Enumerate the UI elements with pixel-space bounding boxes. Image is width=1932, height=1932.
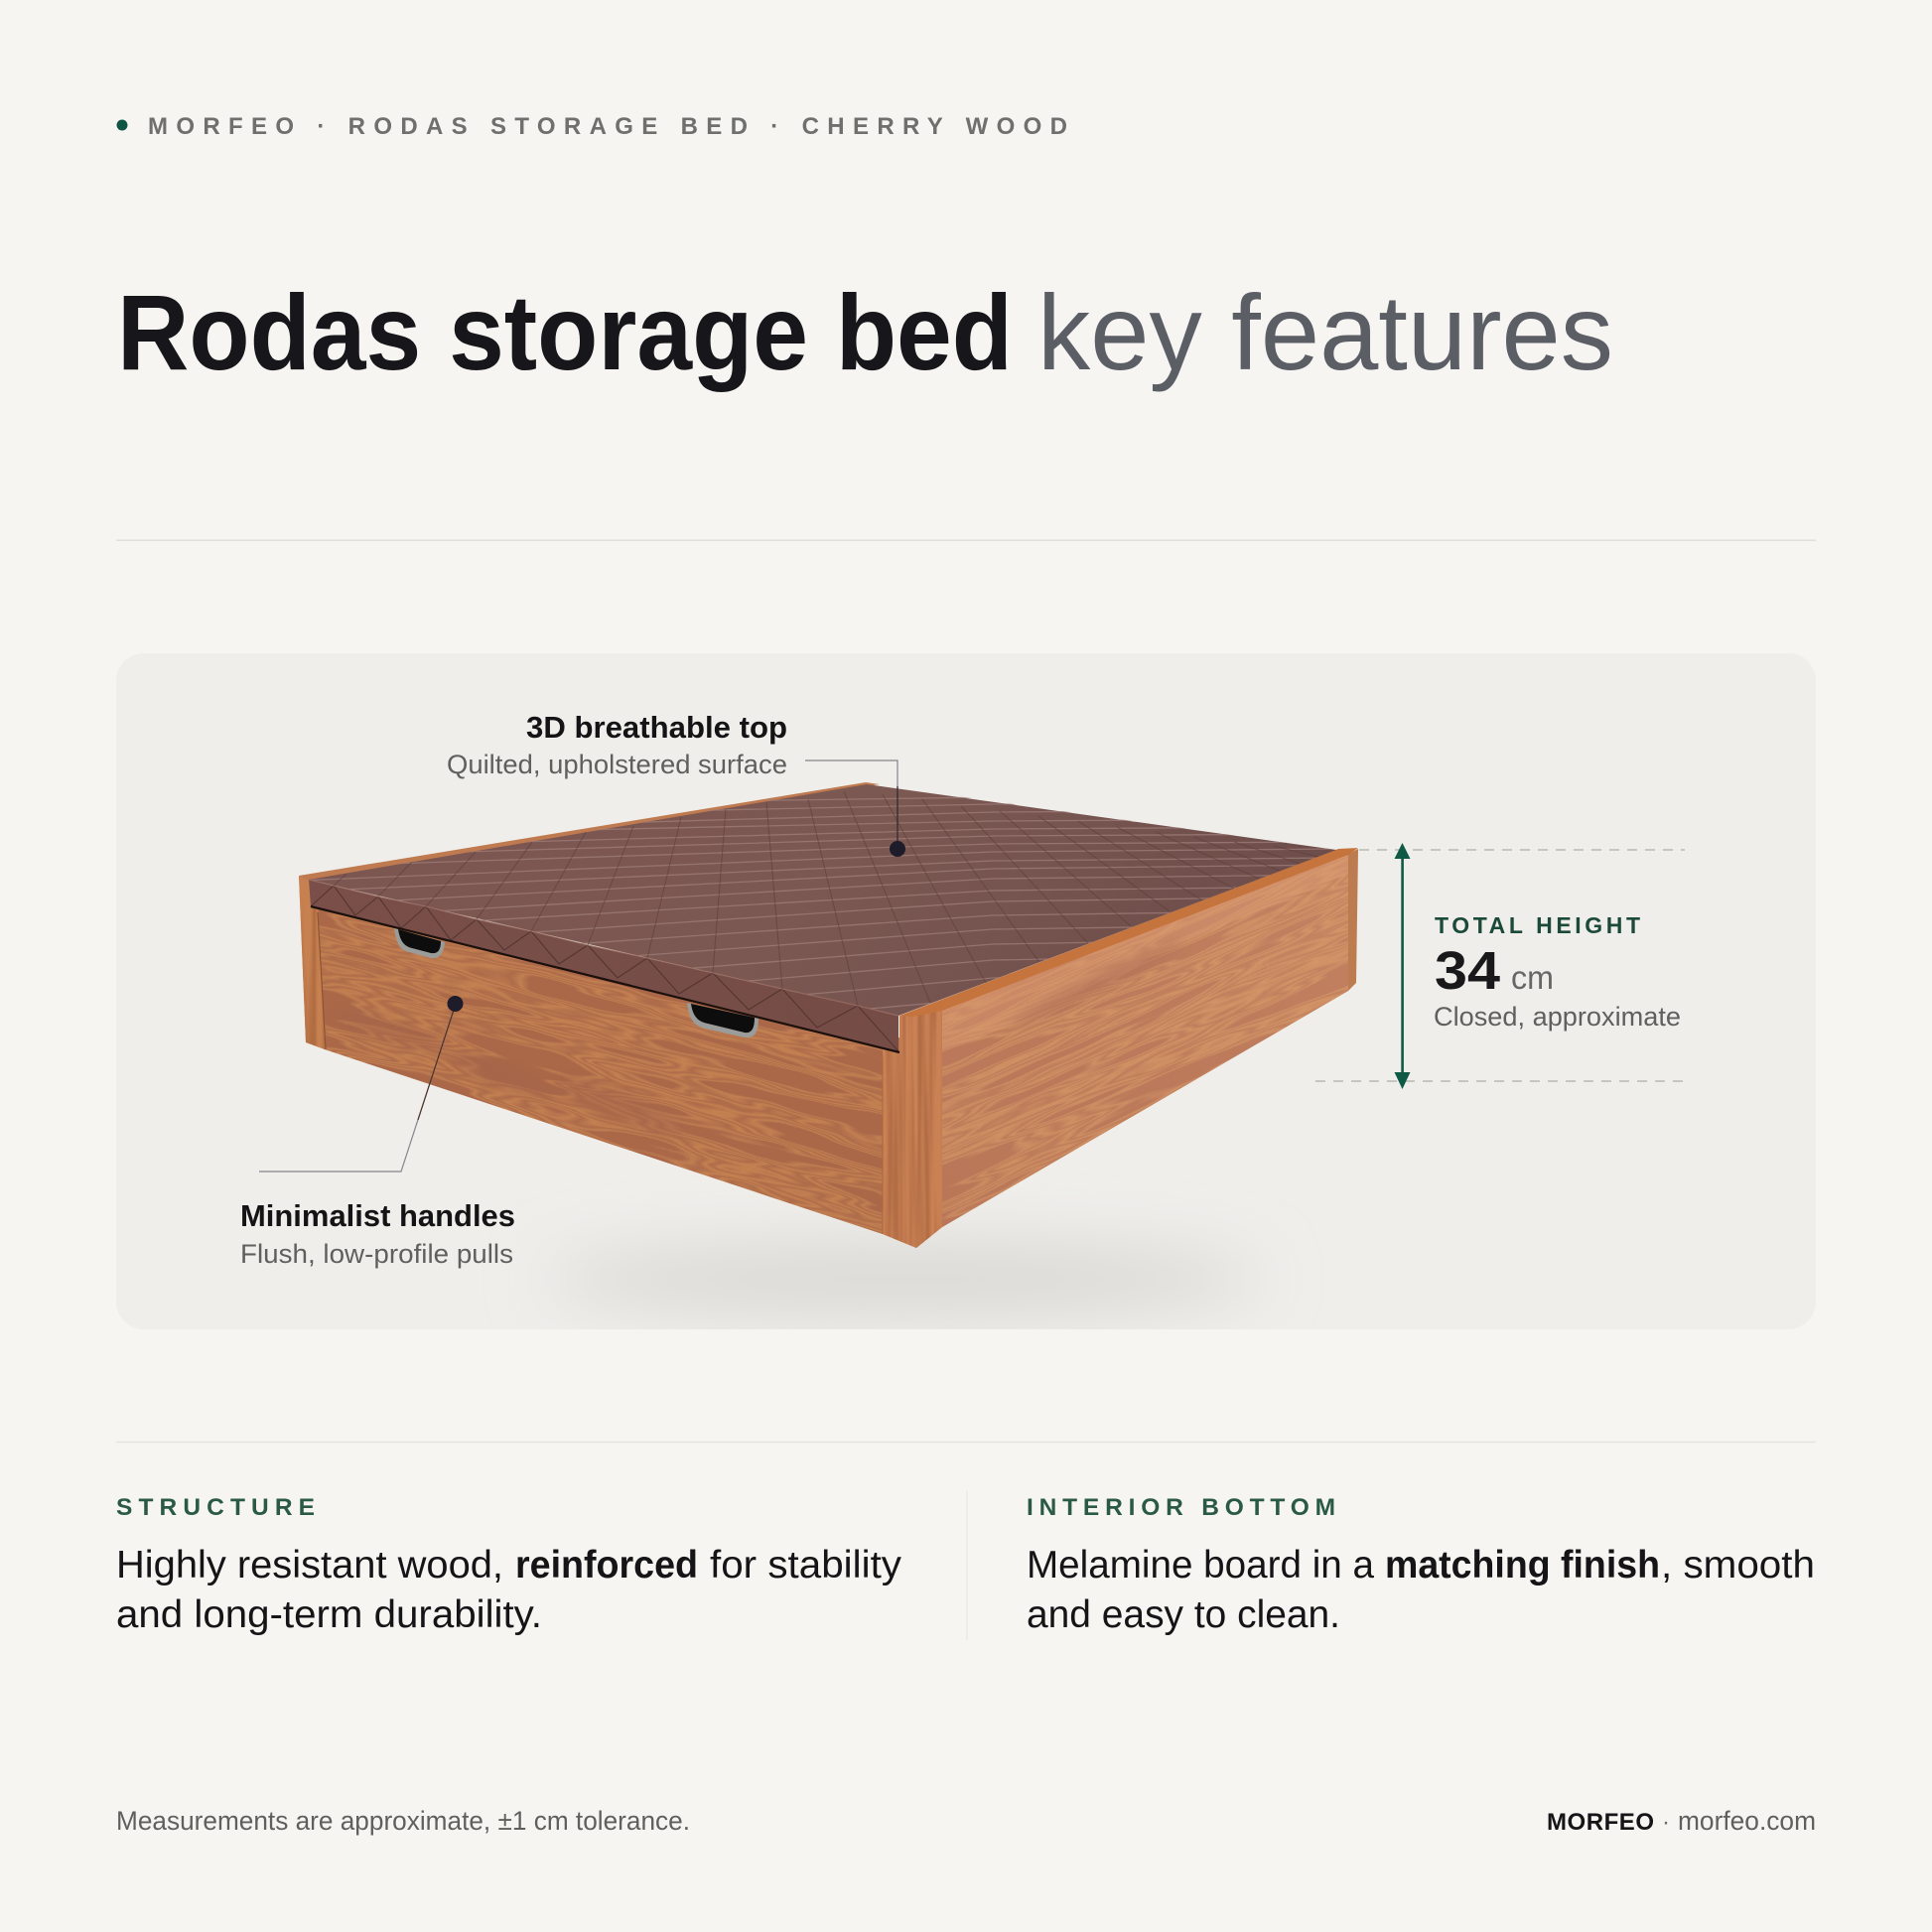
panel inner edge line bbox=[318, 912, 326, 1049]
quilted top surface bbox=[309, 784, 1336, 1016]
front wood panel bbox=[318, 909, 883, 1234]
double arrow bbox=[1394, 843, 1410, 1089]
brand name: MORFEO bbox=[1547, 1809, 1654, 1836]
footer brand bbox=[1547, 1806, 1816, 1836]
section heading: INTERIOR BOTTOM bbox=[1027, 1494, 1335, 1521]
band zigzag stitching bbox=[311, 886, 898, 1051]
body line one end: for stability bbox=[710, 1544, 902, 1587]
unit: cm bbox=[1511, 959, 1554, 996]
fold highlight bbox=[309, 880, 898, 1016]
leader line on bed bbox=[418, 1004, 456, 1120]
dashed guide top bbox=[1359, 849, 1685, 851]
body line one end: , smooth bbox=[1661, 1544, 1815, 1587]
label: TOTAL HEIGHT bbox=[1435, 912, 1640, 938]
leader line bbox=[259, 1004, 456, 1172]
callout heading: 3D breathable top bbox=[526, 710, 787, 745]
section heading: STRUCTURE bbox=[116, 1494, 315, 1521]
dark quilting lines bbox=[334, 791, 1318, 1006]
wooden frame top edge, back-left bbox=[299, 782, 880, 881]
right end strip bbox=[1348, 849, 1358, 991]
value: 34 bbox=[1435, 941, 1500, 1001]
title light part: key features bbox=[1037, 272, 1613, 392]
icon: left handle bbox=[394, 928, 445, 958]
header eyebrow bbox=[117, 113, 1067, 140]
body line two: and easy to clean. bbox=[1027, 1593, 1340, 1636]
icon: green status dot bbox=[117, 119, 127, 131]
title bbox=[117, 272, 1613, 392]
callout heading: Minimalist handles bbox=[240, 1198, 515, 1233]
body line one: Highly resistant wood, bbox=[116, 1544, 503, 1587]
leader line on bed bbox=[897, 786, 898, 849]
eyebrow text: MORFEO · RODAS STORAGE BED · CHERRY WOOD bbox=[148, 113, 1067, 140]
left corner post bbox=[299, 876, 325, 1049]
separator: · bbox=[1662, 1809, 1670, 1836]
text block: interior bottom bbox=[1027, 1494, 1815, 1636]
light quilting lines bbox=[311, 796, 1332, 1009]
post seam line bbox=[882, 1057, 884, 1234]
note: Closed, approximate bbox=[1434, 1002, 1681, 1032]
text block: structure bbox=[116, 1494, 902, 1636]
panel: product illustration bbox=[242, 716, 1685, 1329]
dimension: total height bbox=[1315, 843, 1685, 1089]
callout description: Quilted, upholstered surface bbox=[447, 750, 787, 779]
callout: 3D breathable top bbox=[447, 710, 905, 857]
panel background bbox=[116, 653, 1816, 1329]
website: morfeo.com bbox=[1678, 1806, 1816, 1836]
quilting lines bbox=[311, 791, 1332, 1009]
shadow gap under mattress bbox=[311, 906, 899, 1052]
callout description: Flush, low-profile pulls bbox=[240, 1239, 513, 1269]
callout: minimalist handles bbox=[240, 996, 515, 1269]
bed illustration bbox=[299, 782, 1358, 1248]
title bold part: Rodas storage bed bbox=[117, 272, 1013, 392]
marker dot bbox=[447, 996, 463, 1012]
leader line bbox=[805, 760, 897, 849]
icon: right handle bbox=[687, 1003, 759, 1037]
mattress front band bbox=[309, 880, 898, 1051]
dashed guide bottom bbox=[1315, 1080, 1685, 1082]
body bold phrase: reinforced bbox=[515, 1544, 698, 1587]
bed ground shadow bbox=[546, 1245, 1261, 1312]
footer note: Measurements are approximate, ±1 cm tolerance. bbox=[116, 1806, 690, 1836]
body line two: and long-term durability. bbox=[116, 1593, 542, 1636]
wooden frame top edge, right bbox=[899, 848, 1358, 1017]
body line one: Melamine board in a bbox=[1027, 1544, 1374, 1587]
marker dot bbox=[890, 841, 905, 857]
front corner post bbox=[883, 1011, 942, 1248]
body bold phrase: matching finish bbox=[1385, 1544, 1660, 1587]
right wood panel bbox=[940, 855, 1348, 1227]
